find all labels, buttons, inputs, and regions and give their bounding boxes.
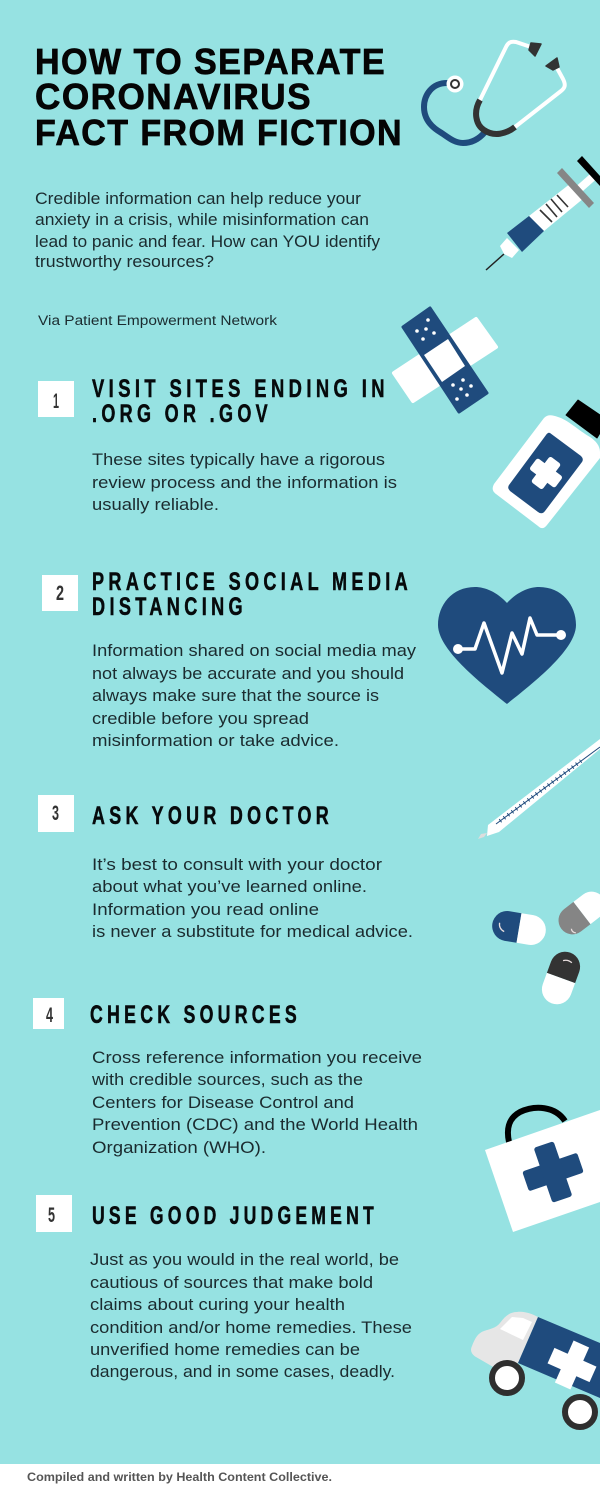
body 1: usually reliable. [92,495,219,514]
heading 5: USE GOOD JUDGEMENT [92,1202,378,1230]
body 5: unverified home remedies can be [90,1340,360,1359]
body 1 [92,450,397,514]
heading 1: VISIT SITES ENDING IN [92,375,389,403]
title [35,41,403,153]
number badge 3: 3 [52,802,59,825]
body 4 [91,1048,422,1157]
body 3: is never a substitute for medical advice. [92,922,413,941]
title: HOW TO SEPARATE [35,41,386,82]
number badge 4: 4 [46,1004,53,1027]
body 5 [90,1250,412,1381]
number badge 1 [38,381,74,417]
icon: blue pill [490,909,548,947]
icon: black pill [538,947,584,1009]
body 4: Centers for Disease Control and [92,1093,354,1112]
body 2: credible before you spread [92,709,309,728]
intro text: anxiety in a crisis, while misinformation can [35,210,369,229]
title: FACT FROM FICTION [35,112,403,153]
icon: syringe [486,156,600,270]
body 2: Information shared on social media may [92,641,417,660]
section 5 [36,1195,412,1381]
intro text: lead to panic and fear. How can YOU identify [35,232,381,251]
heading 2: DISTANCING [92,593,247,621]
body 3 [92,855,413,941]
body 2: misinformation or take advice. [92,731,339,750]
body 5: dangerous, and in some cases, deadly. [90,1362,395,1381]
number badge 3 [38,795,74,832]
body 4: Organization (WHO). [92,1138,266,1157]
body 4: Cross reference information you receive [92,1048,422,1067]
icon: stethoscope [424,42,565,143]
body 1: These sites typically have a rigorous [92,450,385,469]
body 2 [92,641,417,750]
section 3 [38,795,413,941]
intro text: Credible information can help reduce your [35,189,361,208]
icon: bandage [394,308,496,412]
section 2 [42,568,417,750]
number badge 1: 1 [53,390,59,413]
body 5: claims about curing your health [90,1295,345,1314]
heading 1: .ORG OR .GOV [92,400,272,428]
body 3: Information you read online [92,900,319,919]
icon: first aid kit [485,1108,600,1232]
body 4: Prevention (CDC) and the World Health [92,1115,418,1134]
heading 2 [92,568,412,621]
body 5: condition and/or home remedies. These [90,1318,412,1337]
body 4: with credible sources, such as the [91,1070,363,1089]
icon: heart with pulse [438,587,576,704]
heading 2: PRACTICE SOCIAL MEDIA [92,568,412,596]
title: CORONAVIRUS [35,76,312,117]
footer: Compiled and written by Health Content Collective. [27,1472,332,1484]
footer [0,1464,600,1500]
source credit: Via Patient Empowerment Network [38,313,277,328]
heading 1 [92,375,389,428]
intro text: trustworthy resources? [35,252,214,271]
section 4 [33,998,422,1157]
body 2: always make sure that the source is [92,686,379,705]
icon: thermometer [478,739,600,839]
number badge 4 [33,998,64,1029]
number badge 5: 5 [48,1204,55,1227]
body 5: cautious of sources that make bold [90,1273,373,1292]
heading 3: ASK YOUR DOCTOR [92,802,333,830]
body 1: review process and the information is [92,473,397,492]
number badge 5 [36,1195,72,1232]
body 3: It’s best to consult with your doctor [92,855,382,874]
heading 4: CHECK SOURCES [90,1001,301,1029]
body 5: Just as you would in the real world, be [90,1250,399,1269]
intro text [35,189,381,271]
icon: grey pill [553,886,600,940]
section 1 [38,375,397,514]
body 3: about what you’ve learned online. [92,877,367,896]
number badge 2: 2 [56,582,64,605]
icon: ambulance [471,1312,600,1427]
number badge 2 [42,575,78,611]
body 2: not always be accurate and you should [92,664,404,683]
icon: medicine bottle [493,400,600,528]
